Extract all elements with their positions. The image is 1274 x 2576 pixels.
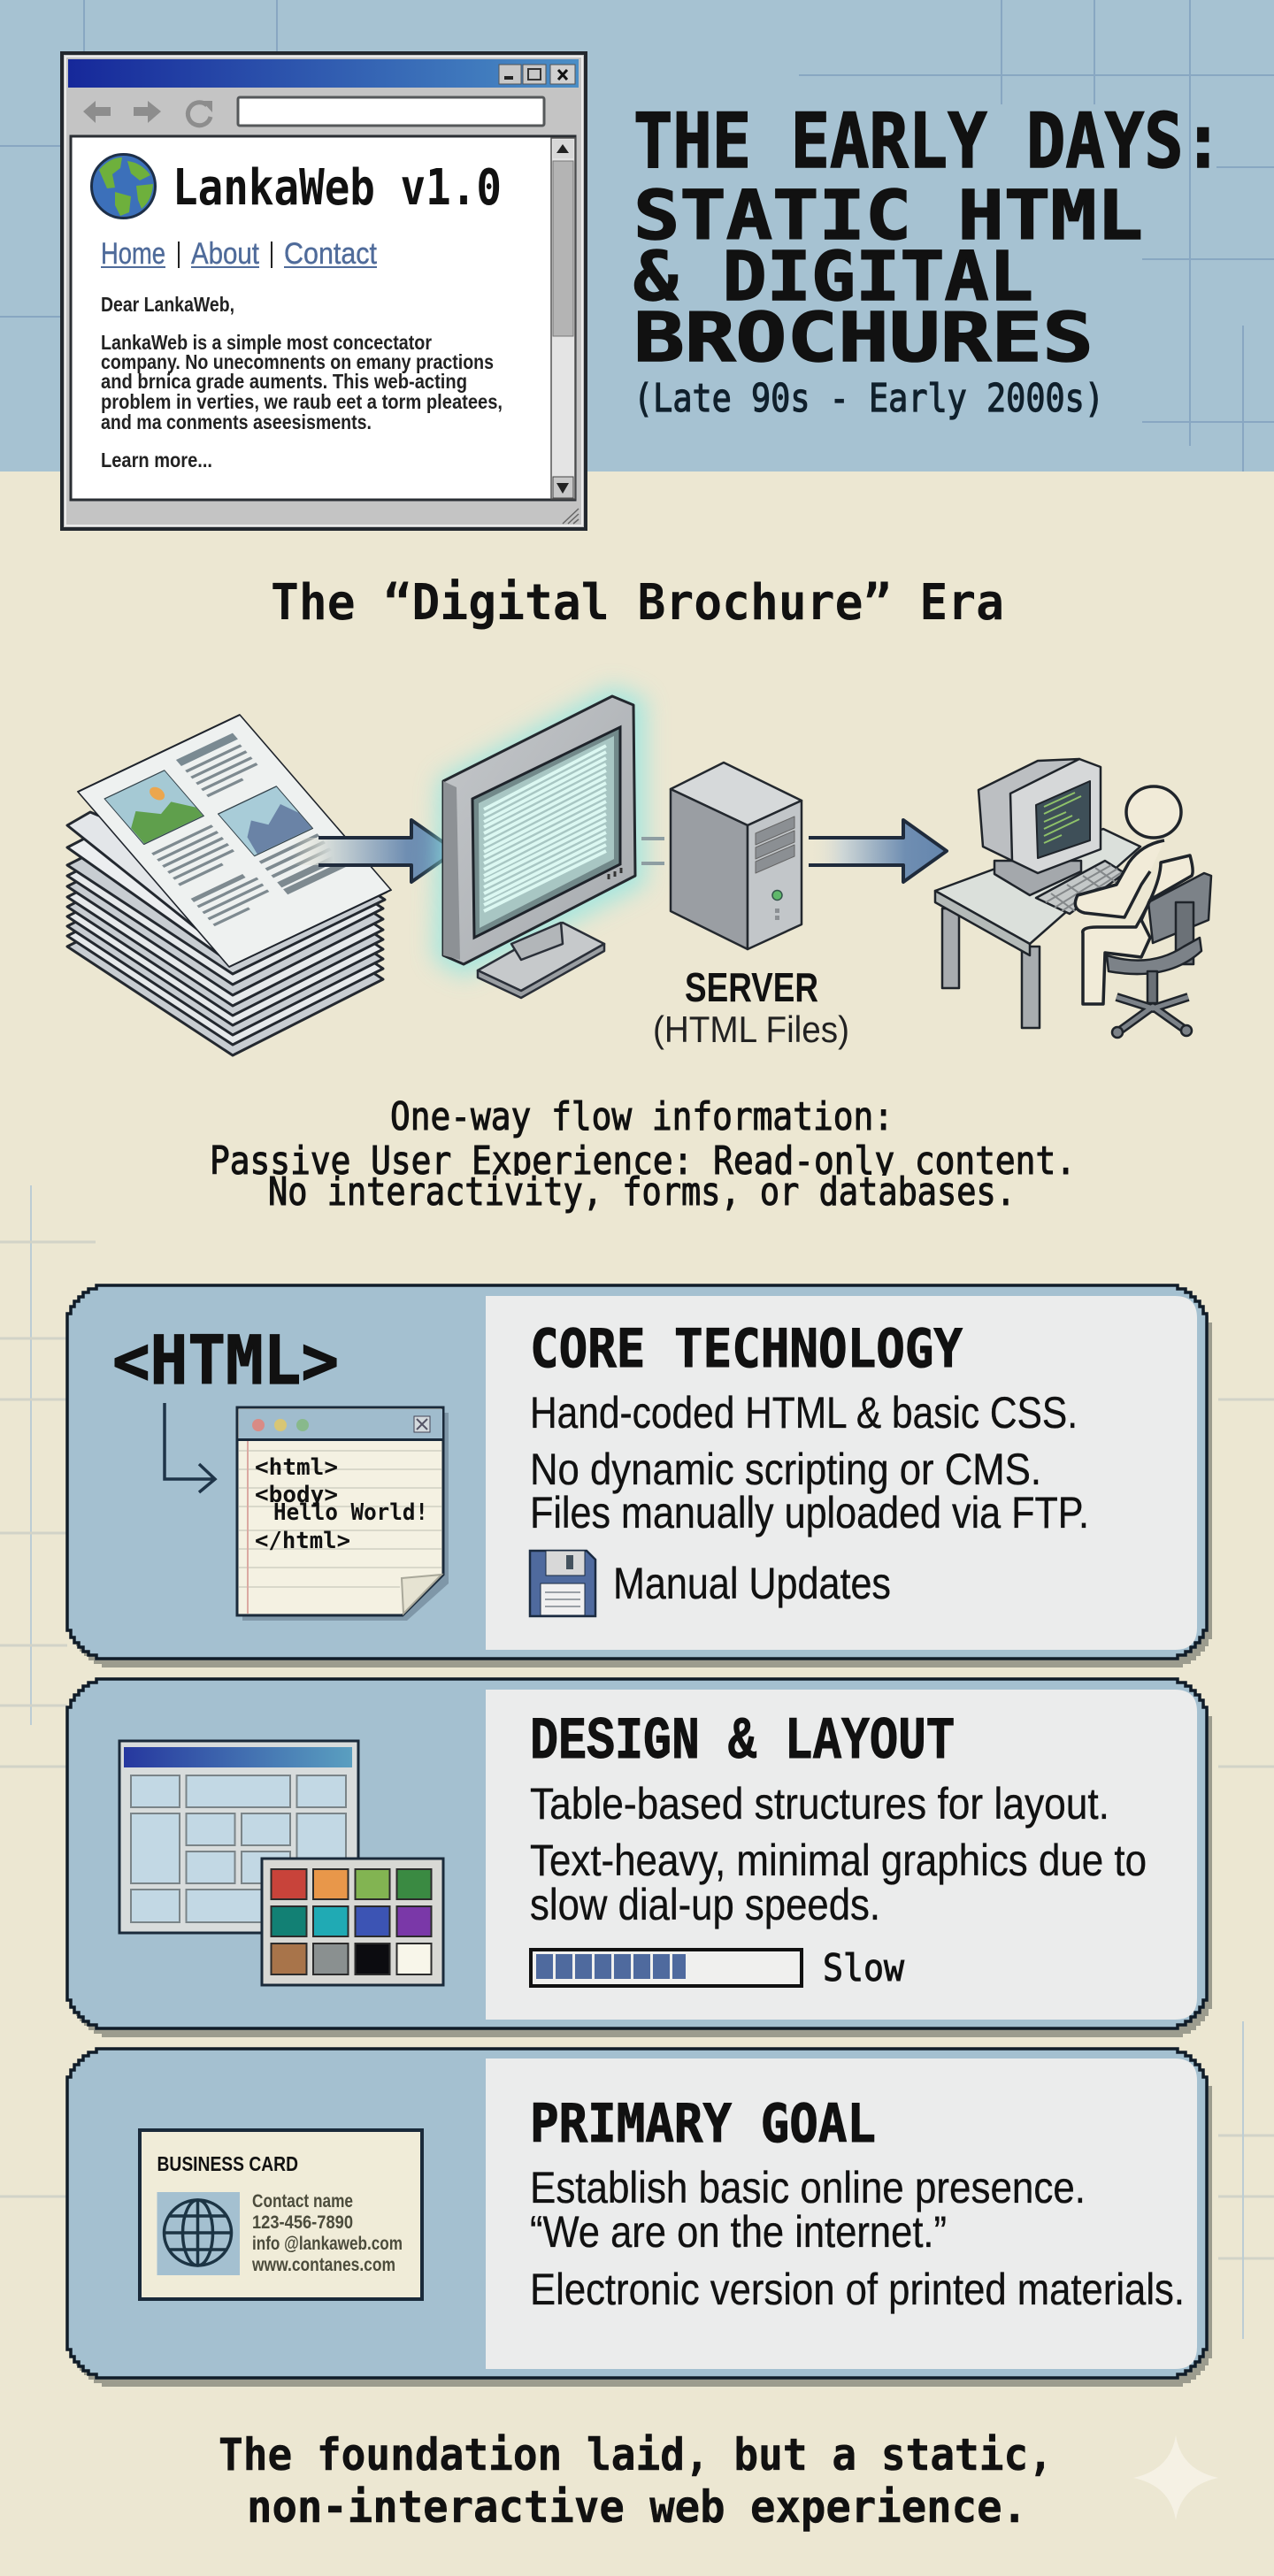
body text: Table-based structures for layout. (530, 1779, 1109, 1828)
nav links: Contact (284, 237, 377, 271)
body text: slow dial-up speeds. (530, 1880, 880, 1929)
server label: (HTML Files) (653, 1008, 849, 1050)
browser window (62, 53, 586, 529)
arrow: server to user (809, 820, 947, 882)
slow label: Slow (823, 1946, 905, 1990)
icon: paper stack (67, 715, 391, 1055)
business card: BUSINESS CARD (157, 2152, 298, 2175)
crt computer (979, 759, 1101, 895)
icon: wireframe globe (165, 2200, 232, 2266)
closing statement: The foundation laid, but a static, (219, 2429, 1053, 2480)
icon: user at desk (935, 759, 1211, 1038)
progress bar (531, 1950, 802, 1986)
notepad window: </html> (255, 1528, 350, 1554)
main title: & DIGITAL (633, 238, 1033, 317)
heading: PRIMARY GOAL (530, 2093, 876, 2155)
main title: BROCHURES (633, 299, 1094, 378)
nav links: About (191, 237, 259, 271)
main title: STATIC HTML (633, 177, 1143, 256)
icon: sparkle (1133, 2435, 1218, 2520)
body text: Electronic version of printed materials. (530, 2265, 1185, 2314)
one-way flow caption (203, 1094, 1079, 1215)
business card: www.contanes.com (251, 2255, 395, 2275)
body copy (101, 293, 503, 472)
toolbar (83, 97, 544, 126)
section heading: The “Digital Brochure” Era (271, 574, 1004, 632)
chair (1107, 873, 1211, 1038)
label: Manual Updates (613, 1559, 891, 1608)
notepad window: <html> (255, 1454, 338, 1481)
server label: SERVER (685, 964, 818, 1010)
main title (633, 97, 1223, 421)
business card: Contact name (252, 2191, 353, 2212)
html tag: <HTML> (112, 1321, 339, 1399)
icon: globe (92, 154, 156, 218)
nav links (101, 237, 377, 271)
arrow: tag to notepad (165, 1403, 215, 1492)
scrollbar (551, 138, 575, 499)
body copy: problem in verties, we raub eet a torm pleatees, (101, 390, 503, 413)
panel: primary goal (67, 2049, 1212, 2387)
site title: LankaWeb v1.0 (173, 159, 502, 217)
page content (71, 136, 575, 500)
business card (140, 2130, 422, 2299)
closing statement: non-interactive web experience. (247, 2481, 1027, 2533)
main title: (Late 90s - Early 2000s) (633, 376, 1104, 421)
body text: Establish basic online presence. (530, 2163, 1086, 2212)
person (1075, 786, 1193, 1004)
notepad window: Hello World! (273, 1499, 428, 1526)
body text (530, 2163, 1185, 2314)
table layout window (119, 1741, 358, 1933)
nav links: Home (101, 237, 165, 271)
icon: glowing monitor (434, 686, 646, 998)
notepad window (237, 1407, 449, 1621)
background grid: lower (0, 1185, 1274, 2339)
body copy: and ma conments aseesisments. (101, 410, 372, 433)
server label (653, 964, 849, 1050)
body copy: Dear LankaWeb, (101, 293, 234, 316)
connector lines: monitor to server (641, 839, 664, 863)
title bar (68, 59, 579, 88)
body copy: Learn more... (101, 448, 212, 472)
panel: core technology (67, 1285, 1212, 1668)
header band (0, 0, 1274, 472)
body text: Hand-coded HTML & basic CSS. (530, 1388, 1078, 1438)
arrow: brochure to monitor (292, 820, 456, 882)
heading: DESIGN & LAYOUT (530, 1708, 955, 1776)
body text: No dynamic scripting or CMS. (530, 1445, 1041, 1494)
body text (530, 1388, 1089, 1537)
color palette (262, 1859, 443, 1985)
desk (935, 829, 1140, 1028)
panel: design and layout (67, 1679, 1212, 2037)
notepad window: <body> (255, 1482, 338, 1508)
body copy: and brnica grade auments. This web-acting (101, 370, 467, 393)
body copy: company. No unecomnents on emany practions (101, 350, 494, 373)
icon: floppy disk (530, 1551, 595, 1616)
top brochure sheet (78, 715, 391, 967)
one-way flow caption: No interactivity, forms, or databases. (268, 1169, 1016, 1215)
body text (530, 1779, 1147, 1929)
body copy: LankaWeb is a simple most concectator (101, 331, 432, 354)
body text: “We are on the internet.” (530, 2207, 947, 2257)
business card: info @lankaweb.com (252, 2234, 403, 2254)
icon: server tower (671, 763, 802, 949)
one-way flow caption: Passive User Experience: Read-only content. (210, 1138, 1076, 1184)
keyboard (1036, 861, 1124, 914)
business card: 123-456-7890 (252, 2212, 353, 2233)
vents (756, 816, 794, 873)
heading: CORE TECHNOLOGY (530, 1318, 963, 1380)
stand (478, 923, 604, 998)
closing statement (219, 2429, 1053, 2533)
body text: Text-heavy, minimal graphics due to (530, 1836, 1147, 1885)
body text: Files manually uploaded via FTP. (530, 1488, 1089, 1537)
one-way flow caption: One-way flow information: (390, 1094, 894, 1139)
